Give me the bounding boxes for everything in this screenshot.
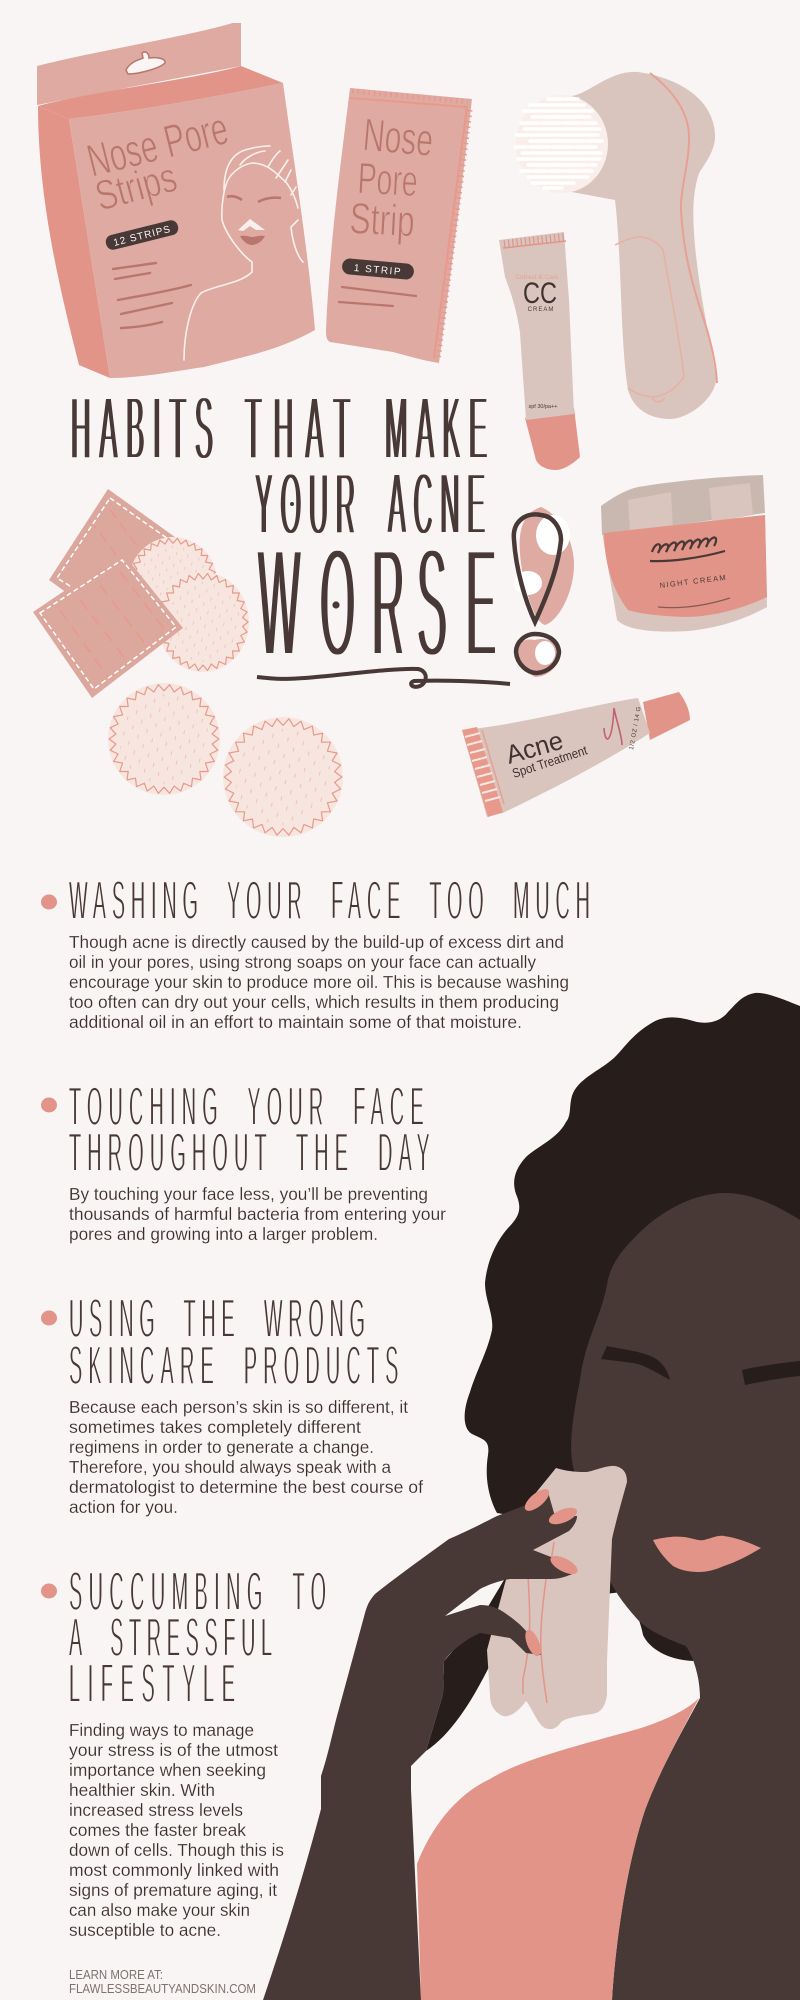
hair strand behind neck bbox=[600, 1550, 700, 1661]
packet copy lines bbox=[339, 287, 416, 306]
towel bbox=[487, 1466, 627, 1729]
heading: THROUGHOUT THE DAY bbox=[69, 1122, 430, 1183]
face and shoulder bbox=[571, 1193, 800, 2000]
section 4 bbox=[41, 1561, 326, 1940]
title line 2: YOUR bbox=[255, 454, 355, 553]
title line 1: MAKE bbox=[385, 379, 487, 479]
heading: SUCCUMBING TO bbox=[69, 1561, 326, 1622]
title line 1: HABITS bbox=[71, 379, 213, 479]
text: nose pore strip: Pore bbox=[356, 154, 419, 206]
illustration: cotton pads and patches bbox=[33, 489, 343, 837]
front patch bbox=[33, 552, 183, 698]
body text: comes the faster break bbox=[69, 1820, 246, 1840]
body text: pores and growing into a larger problem. bbox=[69, 1224, 378, 1244]
text: nose pore strip bbox=[348, 108, 435, 246]
squiggle underline bbox=[257, 669, 510, 687]
text: nose pore strip: Nose bbox=[361, 108, 435, 166]
face details bbox=[227, 196, 281, 202]
body text bbox=[69, 1184, 446, 1244]
bullet bbox=[41, 1584, 57, 1598]
body text bbox=[69, 1720, 284, 1940]
heading bbox=[69, 1076, 430, 1183]
text: strips: Strips bbox=[90, 153, 182, 220]
body text: Though acne is directly caused by the build-up of excess dirt and bbox=[69, 932, 564, 952]
body text: action for you. bbox=[69, 1497, 178, 1517]
body text bbox=[69, 1397, 423, 1517]
heading: SKINCARE PRODUCTS bbox=[69, 1335, 398, 1396]
heading: A STRESSFUL bbox=[69, 1607, 272, 1668]
badge: 12 strips: 12 STRIPS bbox=[112, 224, 172, 249]
portrait line drawing bbox=[184, 146, 303, 360]
title line 2 bbox=[255, 454, 485, 553]
body text: increased stress levels bbox=[69, 1800, 243, 1820]
footer source: FLAWLESSBEAUTYANDSKIN.COM bbox=[69, 1982, 256, 1996]
body text: additional oil in an effort to maintain some of that moisture. bbox=[69, 1012, 522, 1032]
eyebrows bbox=[601, 1346, 800, 1385]
illustration: nose pore strips box bbox=[37, 23, 315, 378]
pad 1 bbox=[129, 537, 217, 625]
illustration: woman bbox=[263, 993, 800, 2000]
illustration: single strip packet bbox=[326, 88, 472, 363]
body text: signs of premature aging, it bbox=[69, 1880, 277, 1900]
footer source bbox=[69, 1968, 256, 1996]
pad 2 bbox=[157, 572, 249, 672]
pad 4 bbox=[223, 717, 343, 837]
body text: can also make your skin bbox=[69, 1900, 250, 1920]
badge: 1 strip bbox=[341, 258, 415, 280]
footer source: LEARN MORE AT: bbox=[69, 1968, 163, 1982]
nails bbox=[521, 1485, 580, 1658]
badge: 1 strip: 1 STRIP bbox=[353, 263, 402, 278]
dress bbox=[417, 1698, 699, 2000]
text: cc cream label: CREAM bbox=[528, 307, 554, 313]
body text: Because each person’s skin is so different, it bbox=[69, 1397, 408, 1417]
body text: By touching your face less, you’ll be preventing bbox=[69, 1184, 428, 1204]
body text: down of cells. Though this is bbox=[69, 1840, 284, 1860]
title line 3: WORSE bbox=[258, 517, 496, 690]
body text: Finding ways to manage bbox=[69, 1720, 254, 1740]
heading bbox=[69, 1561, 326, 1714]
title line 1: THAT bbox=[245, 379, 350, 479]
text: cc cream label: Correct & Care bbox=[515, 274, 559, 281]
body text: oil in your pores, using strong soaps on your face can actually bbox=[69, 952, 536, 972]
text: nose pore: Nose Pore bbox=[82, 102, 233, 187]
body text: regimens in order to generate a change. bbox=[69, 1437, 374, 1457]
illustration: cc cream tube bbox=[499, 232, 580, 470]
title line 2: ACNE bbox=[388, 454, 485, 553]
body text: importance when seeking bbox=[69, 1760, 266, 1780]
text: cc cream label: spf 30/pa++ bbox=[528, 404, 558, 410]
bullet bbox=[41, 1098, 57, 1112]
body text bbox=[69, 932, 569, 1032]
heading: WASHING YOUR FACE TOO MUCH bbox=[69, 870, 590, 931]
text: cc cream label bbox=[515, 274, 559, 410]
body text: too often can dry out your cells, which results in them producing bbox=[69, 992, 559, 1012]
body text: susceptible to acne. bbox=[69, 1920, 221, 1940]
badge: 12 strips bbox=[104, 219, 180, 251]
body text: most commonly linked with bbox=[69, 1860, 279, 1880]
title line 1 bbox=[71, 379, 487, 479]
body text: thousands of harmful bacteria from entering your bbox=[69, 1204, 446, 1224]
body text: Therefore, you should always speak with a bbox=[69, 1457, 391, 1477]
heading: TOUCHING YOUR FACE bbox=[69, 1076, 424, 1137]
illustration: facial brush bbox=[515, 72, 717, 419]
back patch bbox=[49, 489, 186, 600]
illustration: night cream jar bbox=[601, 475, 767, 632]
heading: LIFESTYLE bbox=[69, 1653, 235, 1714]
hair strand behind arm bbox=[426, 1570, 520, 1751]
bullet bbox=[41, 1310, 57, 1326]
title bbox=[71, 379, 510, 690]
icon: exclamation mark bbox=[514, 507, 574, 677]
section 1 bbox=[41, 870, 590, 1032]
bullet bbox=[41, 894, 57, 910]
illustration: acne spot treatment tube: 1/2 OZ / 14 G bbox=[629, 706, 643, 750]
body text: dermatologist to determine the best course of bbox=[69, 1477, 423, 1497]
illustration: acne spot treatment tube: Spot Treatment bbox=[510, 742, 589, 781]
body text: healthier skin. With bbox=[69, 1780, 215, 1800]
box copy lines bbox=[113, 263, 191, 328]
icon: hang hole bbox=[126, 52, 165, 74]
text: night cream: NIGHT CREAM bbox=[659, 573, 728, 590]
scribble brand bbox=[650, 537, 725, 561]
pad 3 bbox=[108, 683, 220, 795]
heading: USING THE WRONG bbox=[69, 1288, 365, 1349]
eye dots in O letters bbox=[290, 502, 340, 609]
text: nose pore strip: Strip bbox=[348, 194, 416, 246]
brush bristles bbox=[515, 95, 608, 193]
section 2 bbox=[41, 1076, 446, 1244]
arm and hand bbox=[263, 1492, 577, 2000]
illustration: acne spot treatment tube bbox=[462, 692, 690, 817]
section 3 bbox=[41, 1288, 423, 1517]
lips bbox=[653, 1536, 761, 1572]
body text: sometimes takes completely different bbox=[69, 1417, 361, 1437]
body text: your stress is of the utmost bbox=[69, 1740, 278, 1760]
body text: encourage your skin to produce more oil. This is because washing bbox=[69, 972, 569, 992]
heading bbox=[69, 1288, 398, 1396]
text: acne spot treatment: Acne bbox=[502, 725, 566, 770]
text: cc cream label: CC bbox=[523, 277, 557, 310]
hair bbox=[465, 993, 800, 1530]
